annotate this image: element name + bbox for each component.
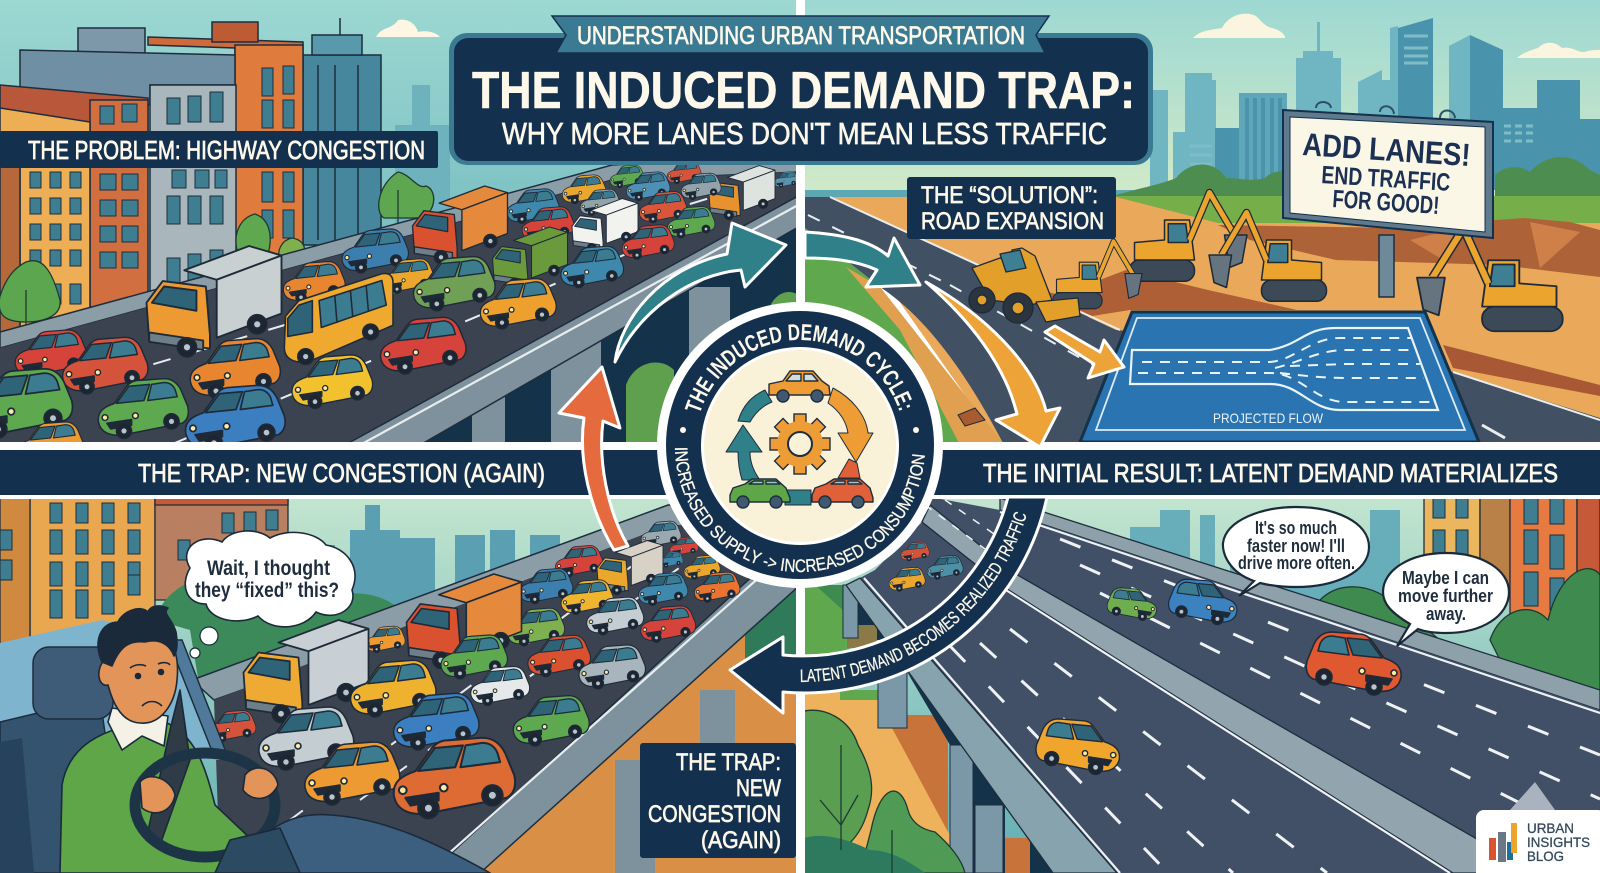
- speech bubble: faster: [1223, 507, 1369, 596]
- arrow: red-orange, trap back to problem: [559, 367, 628, 550]
- speech bubble: faster: drive more often.: [1238, 553, 1355, 573]
- construction machines: [969, 192, 1563, 331]
- arrow: small orange toward blueprint: [1045, 326, 1124, 378]
- tree line and grass: [1110, 157, 1600, 197]
- car interior windshield frame: [0, 620, 230, 873]
- skyline: [1150, 18, 1600, 190]
- central cycle badge: INCREASED SUPPLY -> INCREASED CONSUMPTION: [674, 448, 925, 572]
- billboard: ADD LANES!: [1302, 126, 1472, 173]
- band label: the trap and initial result: [0, 450, 1600, 495]
- logo: urban insights blog: INSIGHTS: [1527, 834, 1590, 850]
- label: the solution, road expansion: THE “SOLUTION”:: [921, 182, 1098, 209]
- central cycle badge: [657, 302, 943, 588]
- panel: the trap, driver in new congestion: [0, 490, 800, 873]
- label: the trap, new congestion: NEW: [736, 775, 781, 802]
- clouds: [1193, 14, 1600, 58]
- subtitle: WHY MORE LANES DON'T MEAN LESS TRAFFIC: [502, 116, 1107, 151]
- billboard: END TRAFFIC: [1321, 161, 1451, 197]
- speech bubble: faster: faster now! I'll: [1247, 536, 1345, 556]
- icon: red car: [812, 479, 873, 508]
- icon: cycle arrows: [726, 388, 873, 505]
- label: the trap, new congestion: [640, 743, 796, 858]
- speech bubble: move further: move further: [1398, 586, 1493, 606]
- arrow: orange, solution to initial result: [926, 282, 1060, 447]
- trees: [0, 172, 434, 330]
- icon: green car: [730, 479, 790, 508]
- band label: the trap and initial result: THE TRAP: NEW CONGESTION (AGAIN): [138, 458, 545, 488]
- label: the trap, new congestion: (AGAIN): [701, 827, 781, 854]
- speech bubble: move further: Maybe I can: [1402, 568, 1489, 588]
- billboard: [1283, 102, 1493, 297]
- title banner: [552, 16, 1049, 53]
- background buildings: [0, 499, 289, 643]
- blueprint: projected flow: PROJECTED FLOW: [1213, 410, 1324, 426]
- title panel: [449, 16, 1153, 165]
- panel: the problem, highway congestion: [0, 0, 800, 466]
- central cycle badge: THE INDUCED DEMAND CYCLE:: [684, 324, 912, 411]
- traffic jam cars: [0, 161, 798, 466]
- road: [800, 197, 1600, 445]
- label: the trap, new congestion: CONGESTION: [648, 801, 781, 828]
- blueprint: projected flow: [1080, 312, 1479, 442]
- speech bubble: move further: [1383, 553, 1509, 646]
- label: the problem, highway congestion: THE PROBLEM: HIGHWAY CONGESTION: [28, 135, 425, 165]
- arrow: navy, latent demand becomes realized traffic: [728, 498, 1048, 714]
- under-bridge ground and piers: [800, 580, 1060, 873]
- logo: urban insights blog: URBAN: [1527, 820, 1574, 836]
- arrow: navy, latent demand becomes realized traffic: LATENT DEMAND BECOMES REALIZED TRAFFIC: [800, 512, 1026, 682]
- green verge: [800, 224, 1004, 445]
- worried driver: [60, 606, 490, 873]
- speech bubble: faster: It's so much: [1255, 518, 1337, 538]
- trees under bridge: [800, 710, 965, 873]
- panel: the initial result, latent demand materializes: [800, 490, 1600, 873]
- label: the problem, highway congestion: [0, 131, 438, 168]
- panel: the solution, road expansion: [800, 0, 1600, 445]
- speech bubble: move further: away.: [1426, 604, 1466, 624]
- billboard: FOR GOOD!: [1332, 185, 1440, 220]
- arrow: teal, problem to solution: [615, 223, 786, 362]
- moving cars: [889, 542, 1401, 774]
- building windows: [30, 66, 294, 304]
- label: the solution, road expansion: ROAD EXPANSION: [921, 208, 1104, 235]
- highway deck: [0, 155, 800, 348]
- label: the solution, road expansion: [907, 177, 1116, 239]
- main title: THE INDUCED DEMAND TRAP:: [472, 62, 1135, 120]
- thought bubble: Wait, I thought: [207, 557, 330, 580]
- label: the trap, new congestion: THE TRAP:: [676, 749, 781, 776]
- thought bubble: [185, 531, 355, 658]
- traffic jam cars: [208, 521, 740, 818]
- thought bubble: they “fixed” this?: [195, 579, 339, 602]
- city buildings: [0, 18, 381, 345]
- arrow: teal continuing into solution: [805, 232, 920, 287]
- icon: yellow car: [769, 371, 830, 402]
- highway carriageways: [846, 497, 1600, 873]
- buildings: [1423, 499, 1600, 619]
- logo: urban insights blog: [1476, 782, 1600, 873]
- icon: gear: [770, 414, 830, 474]
- title banner: UNDERSTANDING URBAN TRANSPORTATION: [577, 22, 1025, 50]
- logo: urban insights blog: BLOG: [1527, 848, 1564, 864]
- roadside trees: [1320, 568, 1600, 690]
- sand and dirt: [826, 197, 1600, 445]
- elevated highway: [192, 505, 700, 700]
